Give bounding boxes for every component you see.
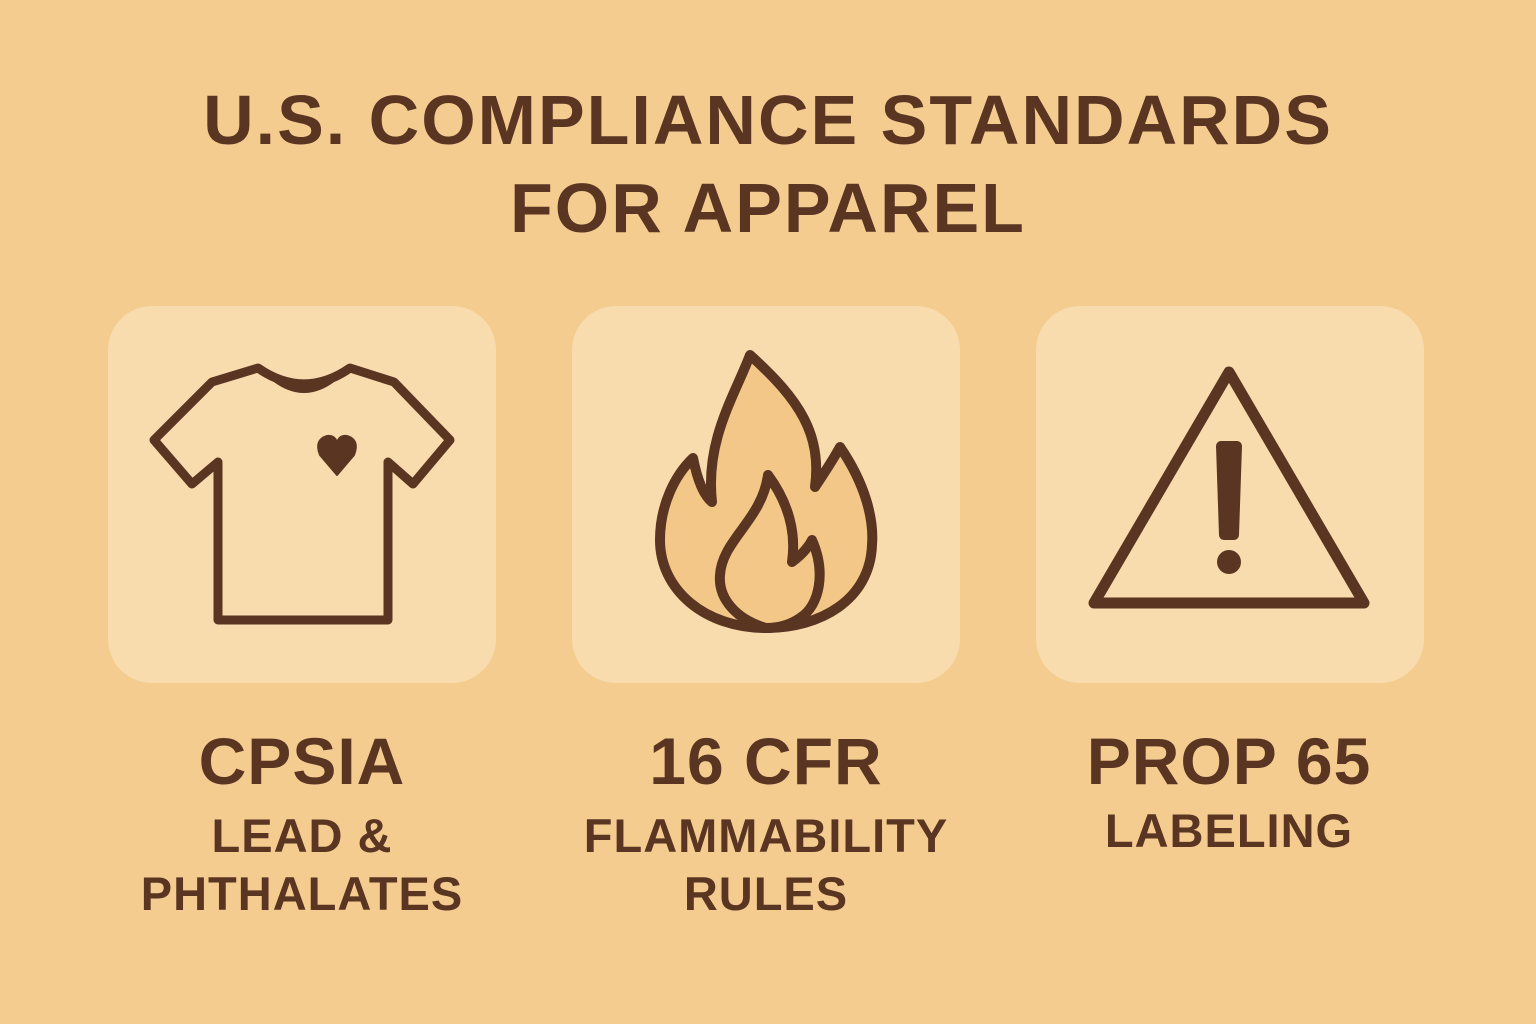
icon: warning triangle [1094,372,1364,603]
label: CPSIA: PHTHALATES [141,867,463,920]
panel: CPSIA icon [108,306,496,683]
icon: flame [660,355,872,628]
label: CPSIA: CPSIA [199,724,405,798]
title: FOR APPAREL [510,169,1026,247]
panel: flammability icon [572,306,960,683]
label: CPSIA [141,724,463,920]
label: CPSIA: LEAD & [212,809,392,862]
label: Prop 65: LABELING [1105,804,1353,857]
title: U.S. COMPLIANCE STANDARDS [203,81,1333,159]
icon: t-shirt [154,368,450,620]
label: 16 CFR: FLAMMABILITY [584,809,948,862]
label: 16 CFR: RULES [684,867,848,920]
label: Prop 65 [1087,724,1371,857]
title [203,81,1333,247]
label: 16 CFR [584,724,948,920]
label: Prop 65: PROP 65 [1087,724,1371,798]
panel: prop 65 icon [1036,306,1424,683]
label: 16 CFR: 16 CFR [649,724,883,798]
